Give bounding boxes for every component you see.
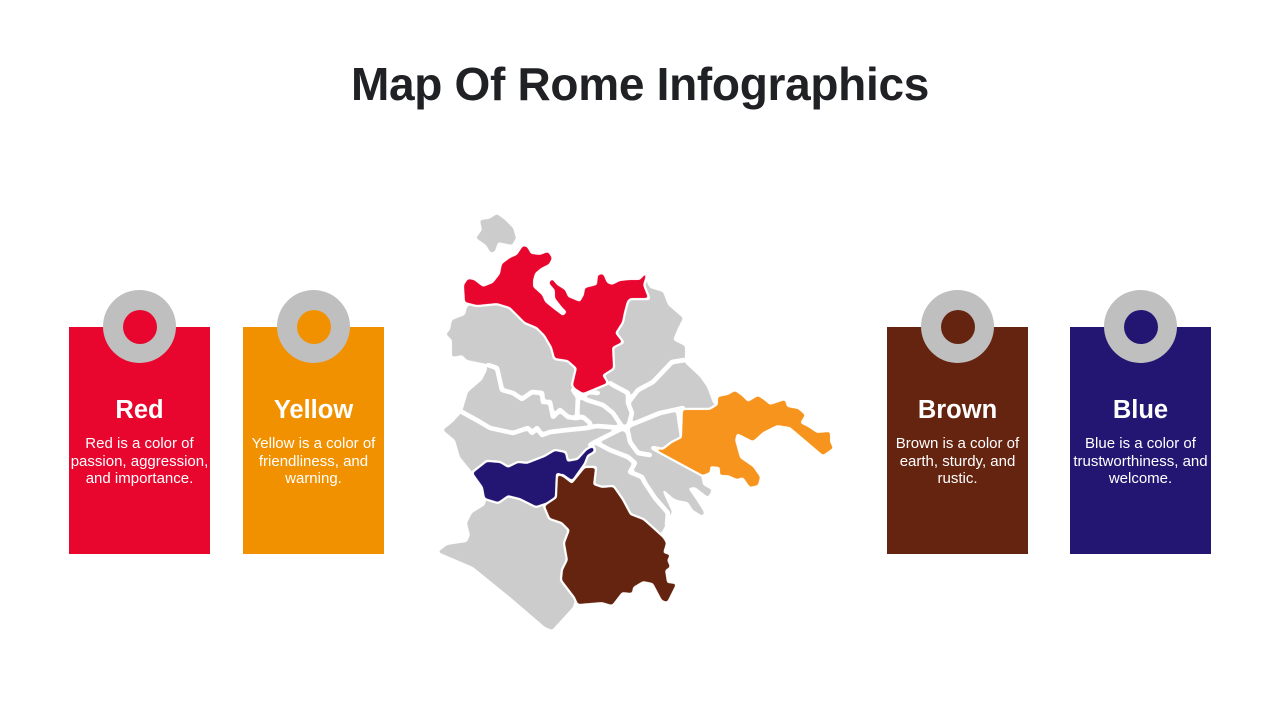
text: brown description: Brown is a color of — [896, 435, 1019, 452]
icon: yellow ring marker — [277, 290, 350, 363]
panel: yellow card — [243, 327, 384, 554]
panel: brown card — [887, 327, 1028, 554]
text: brown description: rustic. — [937, 470, 978, 487]
panel: red card — [69, 327, 210, 554]
text: red description: passion, aggression, — [71, 453, 208, 470]
region: northern island — [476, 214, 516, 253]
map: grey districts — [438, 214, 833, 630]
text: red description — [71, 435, 208, 487]
region: orange district — [653, 391, 833, 487]
text: brown description: earth, sturdy, and — [900, 453, 1015, 470]
text: yellow description: Yellow is a color of — [252, 435, 375, 452]
region: brown district — [545, 468, 676, 605]
icon: red ring marker — [103, 290, 176, 363]
text: blue description: welcome. — [1109, 470, 1172, 487]
text: yellow description: warning. — [285, 470, 342, 487]
text: blue description: trustworthiness, and — [1073, 453, 1208, 470]
text: brown description — [896, 435, 1020, 487]
text: red description: Red is a color of — [85, 435, 194, 452]
text: blue description: Blue is a color of — [1085, 435, 1196, 452]
district borders — [462, 360, 685, 525]
heading: red: Red — [115, 396, 164, 424]
text: red description: and importance. — [86, 470, 193, 487]
heading: blue: Blue — [1113, 396, 1168, 424]
title: Map Of Rome Infographics — [351, 58, 929, 110]
text: blue description — [1073, 435, 1208, 487]
region: grey silhouette — [438, 272, 730, 630]
text: yellow description: friendliness, and — [259, 453, 368, 470]
region: red district — [464, 246, 648, 393]
icon: blue ring marker — [1104, 290, 1177, 363]
panel: blue card — [1070, 327, 1211, 554]
region: blue district — [473, 447, 594, 506]
heading: brown: Brown — [918, 396, 997, 424]
icon: brown ring marker — [921, 290, 994, 363]
text: yellow description — [252, 435, 376, 487]
heading: yellow: Yellow — [274, 396, 353, 424]
